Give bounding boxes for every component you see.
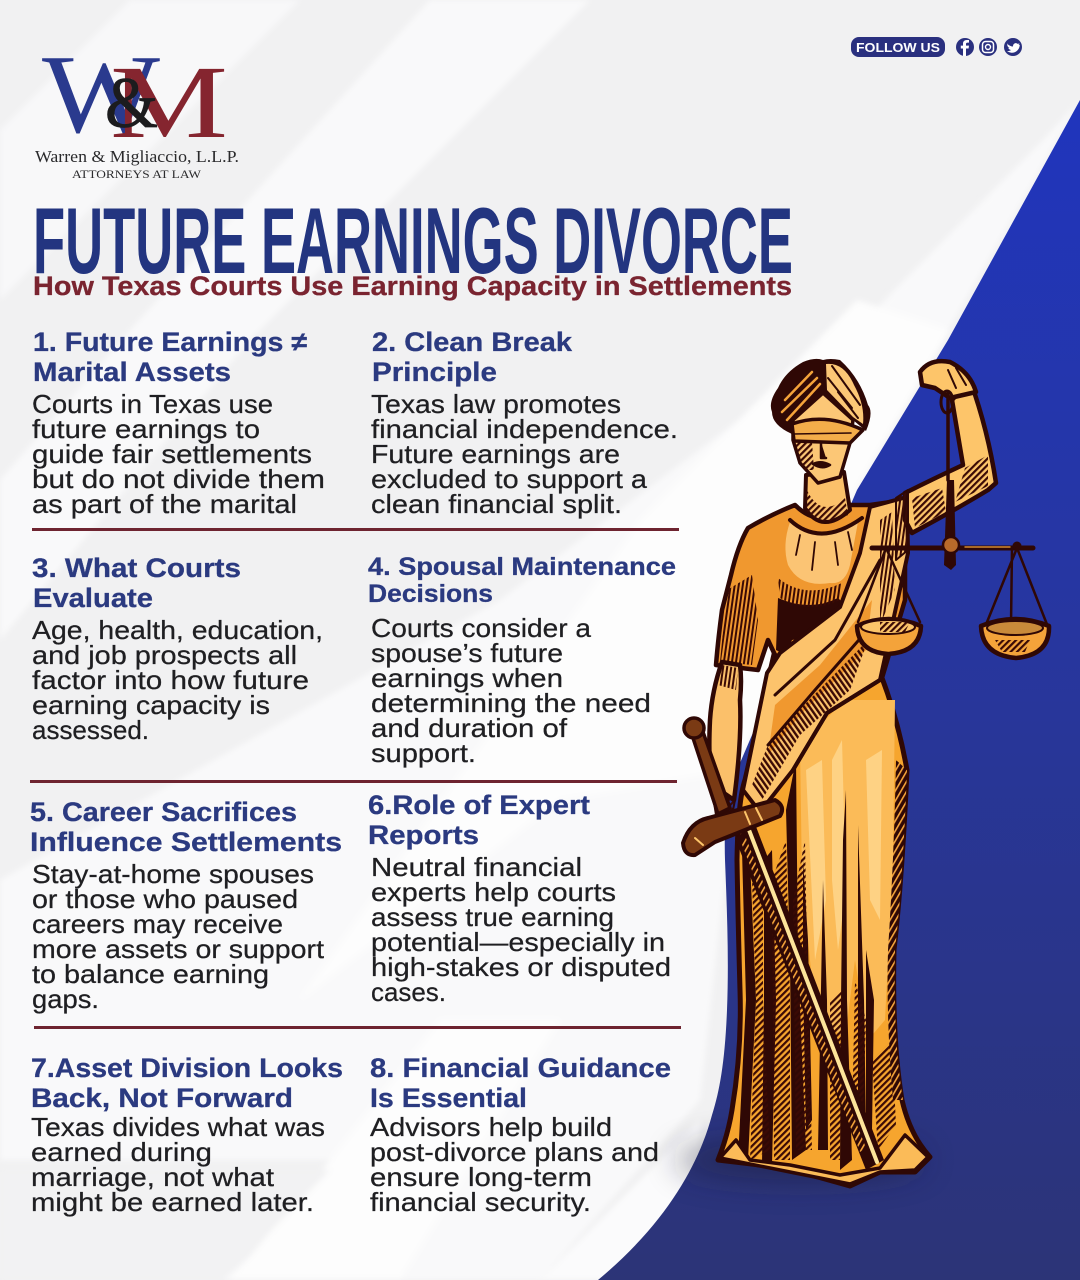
section 4: Decisions bbox=[368, 580, 493, 608]
section 6: Reports bbox=[368, 820, 479, 850]
section 3: Evaluate bbox=[33, 583, 153, 613]
skirt right edge strip bbox=[888, 760, 907, 1100]
section 7: 7.Asset Division Looks bbox=[31, 1053, 343, 1083]
section 4: Courts consider a bbox=[371, 613, 592, 643]
section 7: marriage, not what bbox=[31, 1162, 275, 1192]
blindfold bbox=[792, 419, 863, 443]
section 7: Back, Not Forward bbox=[31, 1083, 293, 1113]
section 7: earned during bbox=[31, 1137, 212, 1167]
section 6: Neutral financial bbox=[371, 852, 582, 882]
hem bbox=[720, 1135, 928, 1184]
section 7: might be earned later. bbox=[31, 1187, 314, 1217]
torso bbox=[716, 500, 905, 690]
head bbox=[771, 359, 871, 522]
section 2: financial independence. bbox=[371, 414, 678, 444]
section 4: earnings when bbox=[371, 663, 563, 693]
section 7 bbox=[31, 1053, 343, 1217]
follow us social bar: FOLLOW US bbox=[856, 40, 940, 55]
section 3: Age, health, education, bbox=[32, 615, 323, 645]
section 1: future earnings to bbox=[32, 414, 260, 444]
logo: Warren & Migliaccio, L.L.P. bbox=[35, 147, 239, 166]
section 5: 5. Career Sacrifices bbox=[30, 797, 297, 827]
section 5 bbox=[30, 797, 342, 1014]
section 4: support. bbox=[371, 738, 476, 768]
section 2: Principle bbox=[372, 357, 497, 387]
icon: lady justice statue bbox=[675, 359, 1049, 1186]
sash bbox=[743, 497, 908, 812]
section 5: more assets or support bbox=[32, 934, 325, 964]
section 6: cases. bbox=[371, 977, 446, 1007]
subtitle: How Texas Courts Use Earning Capacity in Settlements bbox=[33, 271, 792, 301]
skirt bbox=[718, 650, 930, 1186]
section 5: Stay-at-home spouses bbox=[32, 859, 314, 889]
section 4: determining the need bbox=[371, 688, 651, 718]
section 2: excluded to support a bbox=[371, 464, 648, 494]
section 3: 3. What Courts bbox=[32, 553, 241, 583]
raised arm bbox=[896, 361, 996, 560]
section 3: assessed. bbox=[32, 715, 149, 745]
skirt folds bbox=[738, 760, 874, 1170]
floor shadow bbox=[675, 1140, 925, 1180]
section 2 bbox=[371, 327, 678, 519]
logo: & bbox=[105, 63, 158, 143]
logo bbox=[35, 33, 239, 181]
hatching on skirt bbox=[750, 860, 770, 1160]
section 1: as part of the marital bbox=[32, 489, 297, 519]
section 6: experts help courts bbox=[371, 877, 616, 907]
section 8: financial security. bbox=[370, 1187, 591, 1217]
section 2: 2. Clean Break bbox=[372, 327, 573, 357]
section 6 bbox=[368, 790, 671, 1007]
section 1: guide fair settlements bbox=[32, 439, 312, 469]
section 3 bbox=[32, 553, 323, 745]
section 4 bbox=[368, 553, 676, 768]
section 3: and job prospects all bbox=[32, 640, 297, 670]
section 7: Texas divides what was bbox=[31, 1112, 325, 1142]
section 8: Advisors help build bbox=[370, 1112, 612, 1142]
section 5: careers may receive bbox=[32, 909, 283, 939]
section 8: ensure long-term bbox=[370, 1162, 592, 1192]
section 1: Courts in Texas use bbox=[32, 389, 273, 419]
section 5: or those who paused bbox=[32, 884, 298, 914]
section 5: to balance earning bbox=[32, 959, 269, 989]
left arm bbox=[709, 662, 741, 825]
section 1: Marital Assets bbox=[33, 357, 231, 387]
section 8: 8. Financial Guidance bbox=[370, 1053, 671, 1083]
section 6: 6.Role of Expert bbox=[368, 790, 590, 820]
section 4: spouse’s future bbox=[371, 638, 563, 668]
sword bbox=[683, 718, 884, 1170]
section 3: earning capacity is bbox=[32, 690, 270, 720]
section 2: Texas law promotes bbox=[371, 389, 621, 419]
section 8: Is Essential bbox=[370, 1083, 527, 1113]
logo: ATTORNEYS AT LAW bbox=[72, 169, 201, 181]
section 1 bbox=[32, 327, 325, 519]
logo: W bbox=[42, 33, 160, 157]
section 2: Future earnings are bbox=[371, 439, 620, 469]
section 4: 4. Spousal Maintenance bbox=[368, 553, 676, 581]
follow us social bar bbox=[851, 37, 1022, 57]
section 8 bbox=[370, 1053, 671, 1217]
section 3: factor into how future bbox=[32, 665, 309, 695]
blue curved panel bbox=[598, 100, 1080, 1280]
section 8: post-divorce plans and bbox=[370, 1137, 659, 1167]
logo: M bbox=[110, 45, 228, 160]
section 1: but do not divide them bbox=[32, 464, 325, 494]
scales bbox=[857, 391, 1049, 658]
section 6: high-stakes or disputed bbox=[371, 952, 671, 982]
section 6: assess true earning bbox=[371, 902, 614, 932]
section 6: potential—especially in bbox=[371, 927, 665, 957]
section 4: and duration of bbox=[371, 713, 568, 743]
hair bbox=[771, 359, 871, 434]
section 1: 1. Future Earnings ≠ bbox=[33, 327, 307, 357]
section 5: gaps. bbox=[32, 984, 99, 1014]
section 2: clean financial split. bbox=[371, 489, 622, 519]
section 5: Influence Settlements bbox=[30, 827, 342, 857]
